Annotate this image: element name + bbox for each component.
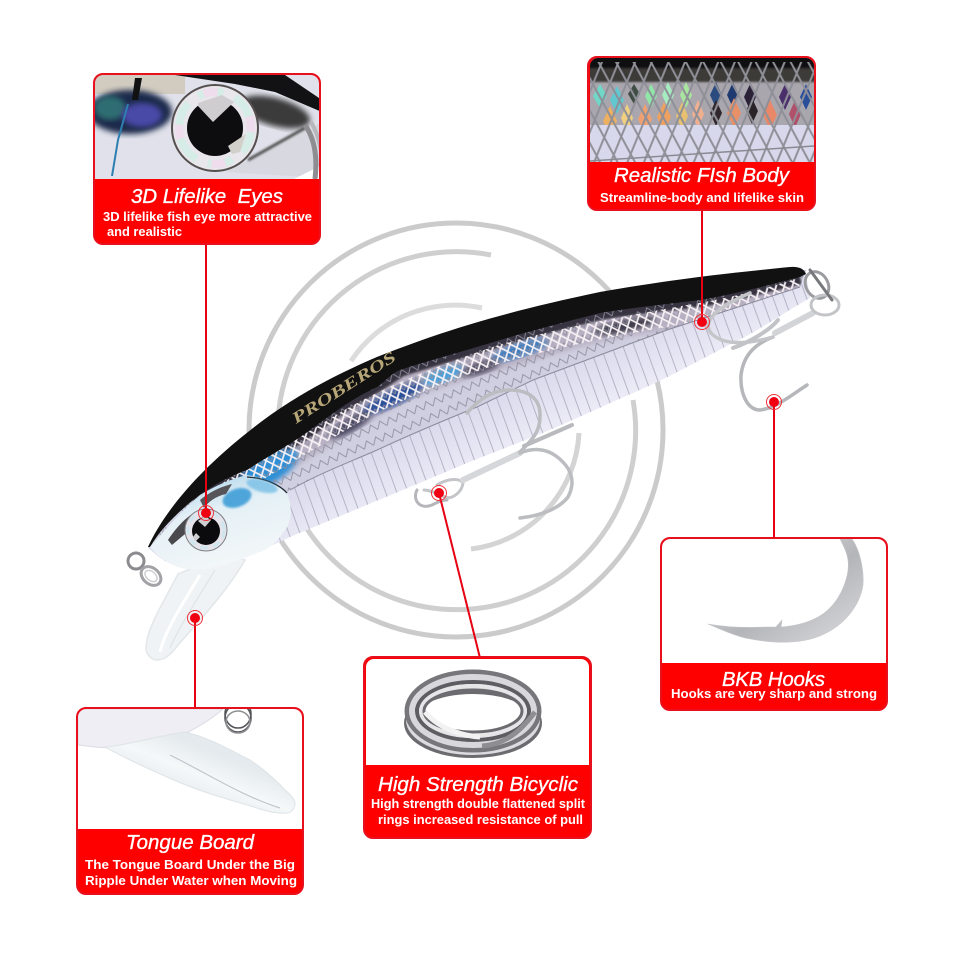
tongue board close-up photo <box>78 709 302 829</box>
frame <box>77 708 303 894</box>
description <box>85 858 297 888</box>
eye <box>185 509 227 551</box>
title: BKB Hooks <box>722 669 825 691</box>
callout lines and red markers <box>188 210 782 709</box>
panel: BKB hooks <box>660 536 888 710</box>
title: Tongue Board <box>126 832 255 854</box>
description <box>371 797 586 827</box>
tail treble hook <box>708 267 839 410</box>
hook close-up photo <box>660 536 888 664</box>
frame <box>364 657 591 838</box>
frame <box>661 538 887 710</box>
description: Ripple Under Water when Moving <box>85 874 297 888</box>
title: Realistic FIsh Body <box>614 165 790 187</box>
description <box>103 210 312 239</box>
head <box>150 475 291 570</box>
split ring photo <box>407 672 539 755</box>
title: High Strength Bicyclic <box>378 774 578 796</box>
panel: tongue board <box>75 700 305 894</box>
description: Streamline-body and lifelike skin <box>600 191 804 205</box>
white border frame <box>94 74 320 244</box>
lure body <box>140 260 820 580</box>
description: rings increased resistance of pull <box>378 813 583 827</box>
concentric ripple rings <box>249 223 663 637</box>
nose split rings <box>128 553 165 589</box>
panel: realistic fish body <box>585 55 817 210</box>
black back <box>148 267 806 547</box>
brand logo: PROBEROS <box>288 348 399 428</box>
description: The Tongue Board Under the Big <box>85 858 295 872</box>
description: and realistic <box>107 225 182 239</box>
tongue board lip <box>146 555 245 660</box>
panel: high strength bicyclic <box>364 657 591 838</box>
skin close-up photo <box>585 55 817 166</box>
panel: 3D lifelike eyes <box>88 70 325 244</box>
holographic diamonds <box>593 82 812 125</box>
title: 3D Lifelike Eyes <box>131 186 283 208</box>
frame <box>588 57 815 210</box>
belly treble hook <box>415 390 572 518</box>
description: High strength double flattened split <box>371 797 586 811</box>
eye close-up photo <box>95 75 319 179</box>
description: 3D lifelike fish eye more attractive <box>103 210 312 224</box>
scale band <box>152 270 806 545</box>
description: Hooks are very sharp and strong <box>671 687 877 701</box>
lateral line <box>290 287 800 490</box>
white image area <box>366 659 589 765</box>
body base with ribs <box>148 267 810 570</box>
